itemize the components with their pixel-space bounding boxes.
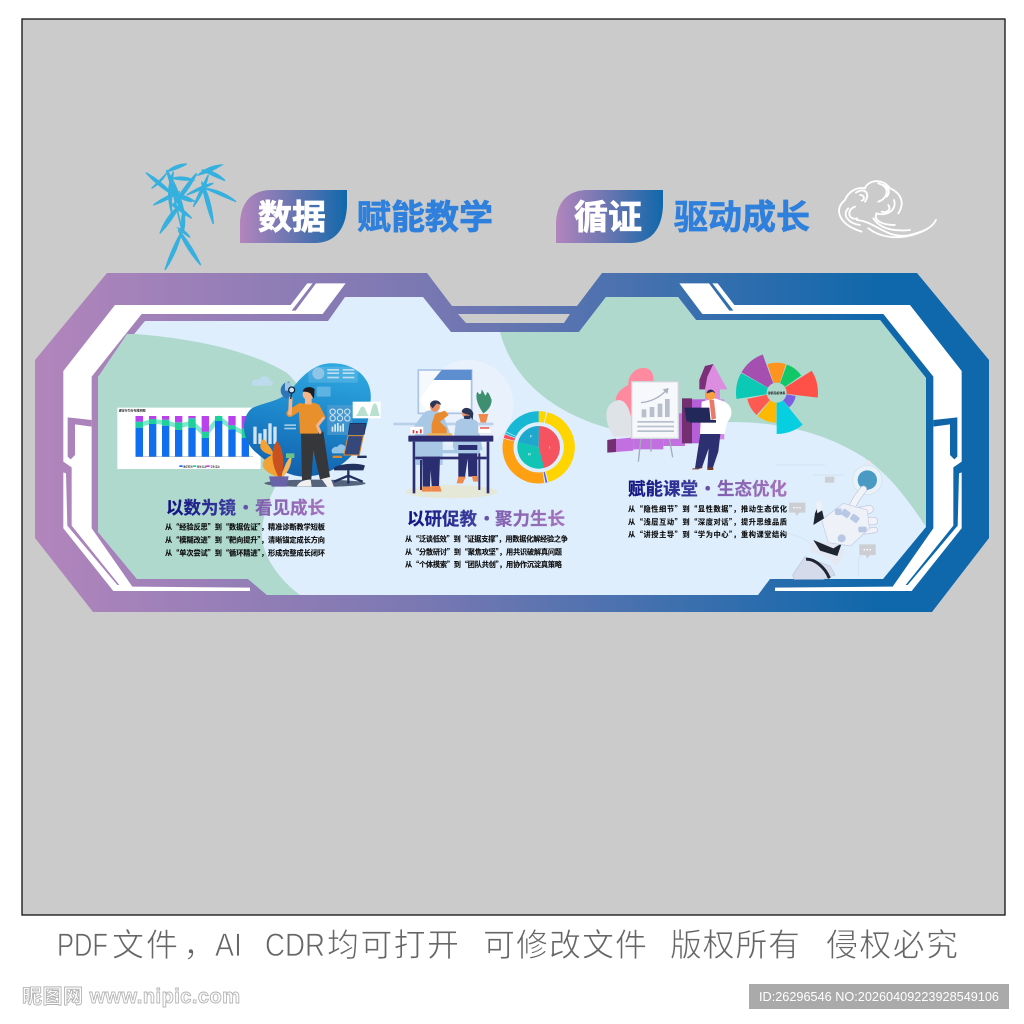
text block: zone 3: 从“讲授主导”到“学为中心”，重构课堂结构 — [628, 530, 787, 540]
shadow — [264, 480, 366, 487]
researcher 2 trousers — [458, 445, 477, 477]
illustration: data analyst with blob and chair — [244, 363, 381, 487]
white chart card — [353, 402, 381, 418]
footer notice: 可修改文件 — [483, 927, 647, 963]
arrow — [699, 364, 727, 403]
bars in blob — [253, 423, 277, 444]
plant — [476, 389, 492, 413]
text block: zone 1: 从“经验反思”到“数据佐证”，精准诊断教学短板 — [165, 522, 326, 532]
footer notice: AI — [215, 927, 242, 963]
chart: stacked bar chart: 教学时间 — [183, 464, 193, 468]
shoes — [692, 467, 713, 470]
text block: zone 1: 以数为镜 — [166, 495, 236, 520]
donut: inner pie — [526, 434, 552, 460]
orange plant — [260, 438, 280, 477]
shirt — [299, 403, 326, 434]
white strips right — [679, 283, 962, 591]
text block: zone 3: 从“浅层互动”到“深度对话”，提升思维品质 — [628, 518, 787, 528]
chart: stacked bar chart: 师生互动 — [197, 464, 207, 468]
text block: zone 1: 从“单次尝试”到“循环精进”，形成完整成长闭环 — [165, 548, 325, 558]
footer notice: 均可打开 — [327, 927, 459, 963]
footer notice: 版权所有 — [670, 927, 800, 963]
illustration: classroom growth board — [606, 357, 813, 470]
icon: bamboo — [146, 164, 236, 270]
text block: zone 1 — [165, 495, 326, 558]
text block: zone 2: 从“泛谈低效”到“证据支撑”，用数据化解经验之争 — [405, 534, 568, 544]
pot — [269, 476, 289, 487]
text block: zone 3: 从“隐性细节”到“显性数据”，推动生态优化 — [628, 504, 787, 514]
text block: zone 3 — [628, 476, 787, 540]
faint circle and window — [423, 360, 513, 450]
text block: zone 3: 赋能课堂 — [628, 476, 698, 501]
text block: zone 3: · — [699, 476, 716, 501]
dashboard — [327, 405, 352, 435]
text block: zone 2: 以研促教 — [407, 506, 477, 531]
footer notice: 侵权必究 — [826, 927, 958, 963]
text block: zone 1: · — [237, 495, 254, 520]
donut: outer ring — [498, 406, 580, 488]
text block: zone 2: 从“个体摸索”到“团队共创”，用协作沉淀真策略 — [405, 560, 563, 570]
wrist — [810, 541, 845, 567]
researcher 1 coat — [412, 410, 450, 465]
flasks — [410, 427, 491, 434]
trousers — [301, 432, 330, 480]
researcher 1 head — [430, 402, 440, 412]
illustration: classroom growth board: 诊断指标体系 — [768, 390, 786, 395]
wheel chart — [741, 357, 813, 429]
heading: 循证 驱动成长: 驱动成长 — [674, 190, 810, 239]
footer notice: PDF — [57, 927, 108, 963]
researcher 2 head — [462, 408, 472, 418]
fingers — [852, 489, 875, 532]
illustration: lab researchers: F — [530, 434, 533, 439]
chart: stacked bar chart — [117, 408, 261, 469]
footer notice — [57, 927, 958, 963]
head — [305, 397, 312, 404]
arms — [284, 398, 296, 414]
robot arm orange — [432, 411, 449, 433]
illustration: lab researchers: R — [528, 451, 531, 456]
illustration: lab researchers: I — [549, 445, 550, 450]
text block: zone 2: · — [478, 506, 496, 531]
white strips left — [63, 283, 346, 591]
illustration: robot hand — [777, 461, 882, 579]
chart: stacked bar chart: 课堂行为分布堆积图 — [119, 408, 146, 413]
panel: inner light area — [98, 297, 926, 595]
presentation board — [638, 438, 673, 462]
footer notice: CDR — [265, 927, 325, 963]
faint tech lines — [777, 465, 875, 575]
footer notice: 文件 — [112, 927, 178, 963]
pie icons and panels — [281, 382, 290, 399]
thumb — [813, 502, 824, 525]
grey chat bubbles — [789, 477, 876, 558]
shoes — [422, 487, 432, 492]
purple step blocks — [607, 437, 633, 453]
text block: zone 1: 从“模糊改进”到“靶向提升”，清晰锚定成长方向 — [165, 536, 325, 546]
palm — [822, 503, 869, 546]
id stamp — [749, 984, 1009, 1009]
heading: 循证 驱动成长: 循证 — [574, 190, 642, 239]
researcher 1 trousers — [422, 457, 440, 487]
heading: 数据 赋能教学: 赋能教学 — [357, 190, 493, 239]
text block: zone 3: 生态优化 — [717, 476, 787, 501]
text block: zone 2: 聚力生长 — [495, 506, 565, 531]
researcher 2 coat — [453, 418, 483, 453]
magnifier — [289, 387, 295, 393]
chat target circle — [853, 465, 882, 495]
mint area right — [500, 297, 926, 527]
presenter — [695, 432, 721, 468]
office chair — [333, 423, 367, 484]
illustration: lab researchers — [393, 360, 580, 498]
mint area left — [98, 334, 306, 595]
small cloud in blob — [332, 444, 348, 453]
ground shadow — [406, 485, 498, 498]
heading: 数据 赋能教学 — [240, 190, 493, 243]
pink and grey shrubs — [616, 368, 654, 427]
blob background — [244, 363, 371, 476]
heading: 循证 驱动成长 — [556, 190, 810, 243]
cloud — [252, 376, 273, 386]
heading: 数据 赋能教学: 数据 — [258, 190, 326, 239]
text block: zone 1: 看见成长 — [255, 495, 325, 520]
table — [408, 436, 493, 442]
text block: zone 2 — [405, 506, 568, 570]
chart: stacked bar chart: 学生活动 — [210, 464, 220, 468]
watermark logo text: 昵图网 www.nipic.com — [22, 986, 240, 1008]
laptop — [684, 408, 711, 422]
icon: auspicious cloud — [839, 181, 936, 237]
id stamp: ID:26296546 NO:20260409223928549106 — [759, 989, 999, 1004]
forearm — [793, 557, 835, 579]
panel: octagonal display frame — [35, 273, 989, 612]
shoes — [297, 480, 312, 487]
text block: zone 2: 从“分散研讨”到“聚焦攻坚”，用共识破解真问题 — [405, 548, 562, 558]
footer notice: ， — [183, 927, 215, 963]
